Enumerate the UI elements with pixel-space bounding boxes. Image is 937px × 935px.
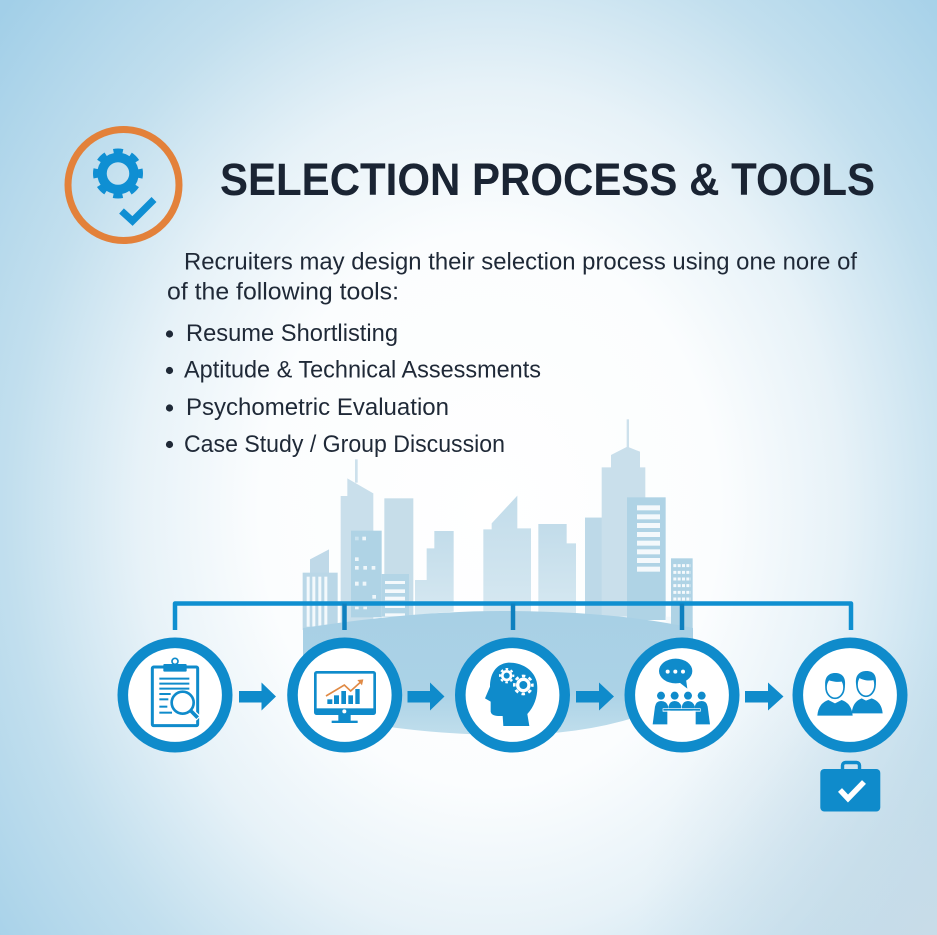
arrow 3 (576, 682, 614, 710)
arrow 4 (745, 682, 784, 710)
intro paragraph: Recruiters may design their selection process using one nore of (184, 248, 857, 276)
step 1: resume shortlisting icon (123, 643, 227, 747)
intro paragraph (167, 248, 857, 306)
bullet list of tools: Case Study / Group Discussion (184, 431, 505, 458)
connector bracket (175, 604, 851, 630)
arrow 1 (239, 682, 276, 710)
city skyline illustration (303, 419, 693, 630)
intro paragraph: of the following tools: (167, 278, 399, 306)
header icon: gear and check in orange ring (68, 130, 179, 240)
arrow 2 (408, 682, 444, 710)
bullet list of tools: Resume Shortlisting (186, 320, 398, 347)
step 3: psychometric head icon (460, 643, 565, 747)
icon: briefcase with check (820, 762, 880, 812)
step 2: technical assessment monitor icon (292, 643, 397, 747)
bullet list of tools: Psychometric Evaluation (186, 394, 449, 421)
elliptical plaza under the skyline (303, 611, 693, 735)
step 4: group discussion icon (630, 643, 734, 747)
bullet list of tools (166, 320, 541, 458)
bullet list of tools: Aptitude & Technical Assessments (184, 356, 541, 384)
step 5: two candidates icon (798, 643, 902, 747)
title: SELECTION PROCESS & TOOLS (220, 154, 875, 205)
